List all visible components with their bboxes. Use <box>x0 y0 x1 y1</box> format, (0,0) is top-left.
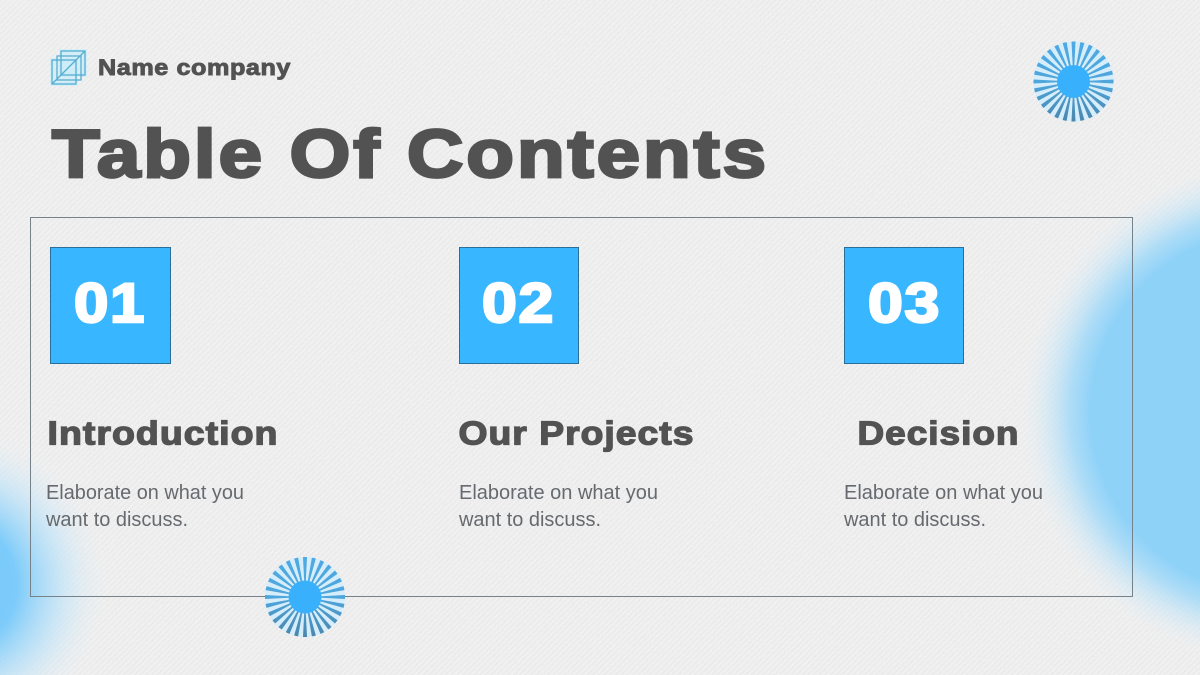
number box 03 <box>844 248 964 364</box>
number box 03: 03 <box>868 271 941 334</box>
description 01: Elaborate on what you <box>46 482 244 504</box>
section 02 <box>458 248 694 531</box>
description 01 <box>45 482 244 531</box>
section 03 <box>843 248 1043 531</box>
company name: Name company <box>98 55 291 80</box>
number box 01: 01 <box>74 271 146 334</box>
blurred blue blob: right <box>1000 150 1200 675</box>
content frame <box>30 218 1132 596</box>
heading: Introduction: Introduction <box>48 414 278 452</box>
description 02: want to discuss. <box>458 509 601 531</box>
blurred blue blob: bottom left <box>0 420 110 675</box>
heading: Our Projects: Our Projects <box>458 414 694 452</box>
description 01: want to discuss. <box>45 509 188 531</box>
number box 02: 02 <box>482 271 555 334</box>
description 03: Elaborate on what you <box>844 482 1043 504</box>
sunburst: bottom <box>265 557 345 637</box>
description 02 <box>458 482 658 531</box>
heading: Decision: Decision <box>858 414 1020 452</box>
title: Table Of Contents <box>52 116 769 192</box>
logo: overlapping wireframe cubes <box>52 51 85 84</box>
section 01 <box>45 248 278 531</box>
sunburst: top right <box>1034 42 1114 122</box>
description 02: Elaborate on what you <box>459 482 658 504</box>
description 03 <box>843 482 1043 531</box>
number box 02 <box>460 248 578 364</box>
number box 01 <box>50 248 170 364</box>
description 03: want to discuss. <box>843 509 986 531</box>
